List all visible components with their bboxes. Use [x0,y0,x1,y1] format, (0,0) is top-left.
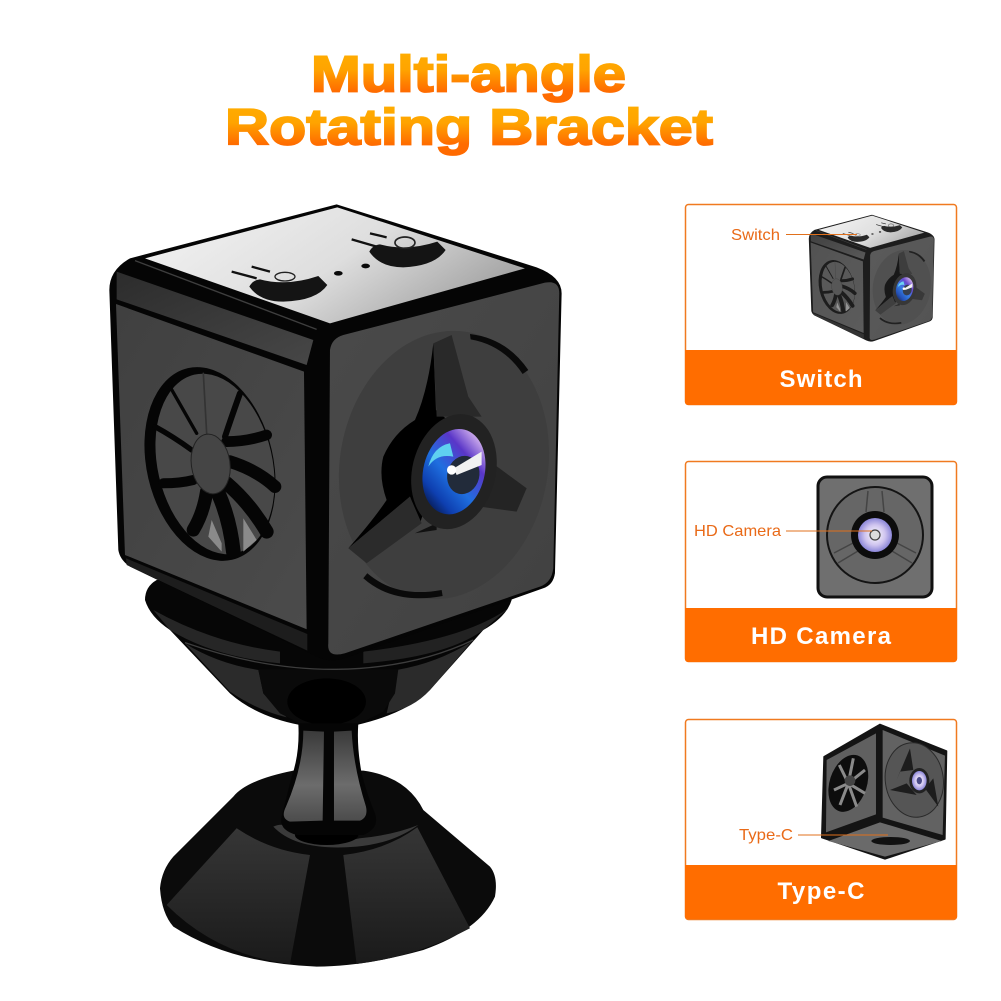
bracket cup [145,580,512,725]
mini camera front view [818,477,932,597]
panel: hd camera [685,462,957,662]
panel: type-c [685,720,957,920]
label bar: switch [685,350,957,405]
main camera cube [109,204,570,660]
mode button [352,233,446,267]
panel frame [686,462,956,662]
lens [399,405,509,538]
panel frame [686,204,956,404]
title line 1: Multi-angle [311,46,626,102]
callout: switch: Switch [731,227,780,244]
indicator dots [334,264,370,276]
panel frame [686,720,956,920]
mini cube: top switch view [809,215,937,342]
stem [281,723,376,835]
callout: hd camera: HD Camera [694,523,781,540]
label bar: type-c: Type-C [778,878,864,905]
power button [232,267,327,302]
label bar: hd camera [685,608,957,662]
fan vent [126,354,294,574]
base cone [160,771,496,967]
mini cube: underside view [822,724,948,859]
right face [328,282,559,655]
top face [145,207,525,323]
panel: switch [685,204,957,405]
label bar: switch: Switch [780,366,862,393]
left face [116,261,317,651]
label bar: type-c [685,865,957,919]
label bar: hd camera: HD Camera [751,623,892,650]
base stand [145,580,512,967]
title line 2: Rotating Bracket [225,98,713,156]
callout: switch [731,227,857,244]
cube silhouette [109,204,562,660]
lens mount [318,314,570,616]
title [225,46,713,156]
callout: type-c: Type-C [739,827,793,844]
